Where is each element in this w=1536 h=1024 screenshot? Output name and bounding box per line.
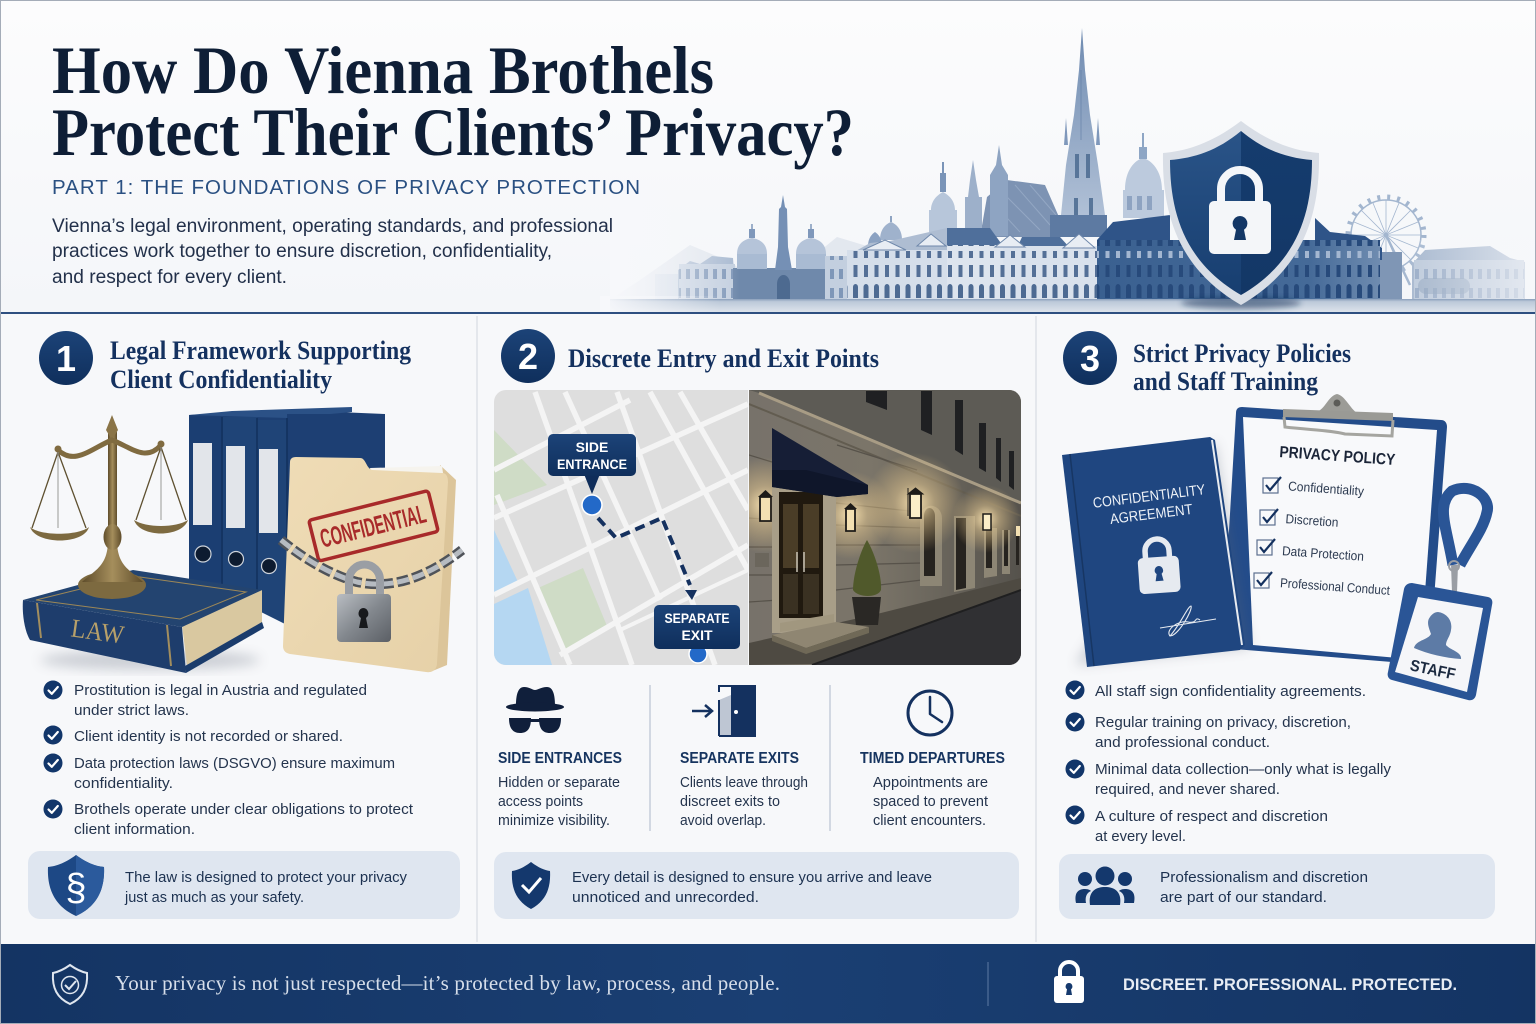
illustration: clipboard	[1222, 394, 1447, 665]
bullet: minimal data	[1066, 760, 1392, 798]
feature: timed departures: TIMED DEPARTURES	[860, 750, 1005, 767]
lamps glow	[749, 460, 772, 549]
heading: Legal Framework Supporting	[110, 335, 411, 365]
feature: timed departures: spaced to prevent	[873, 793, 989, 810]
person silhouette	[1414, 612, 1461, 659]
pin: separate exit: SEPARATE	[664, 610, 730, 626]
illustration: confidentiality agreement book: AGREEMENT	[1109, 502, 1194, 528]
skyline illustration of Vienna	[600, 28, 1536, 312]
feature: side entrances: access points	[498, 793, 583, 810]
door	[772, 483, 836, 633]
feature: separate exits	[680, 686, 808, 829]
bullet: data protection: Data protection laws (DSGVO) ensure maximum	[74, 755, 395, 772]
panel: privacy policies	[1059, 331, 1495, 919]
icon: people	[1075, 866, 1135, 905]
feature: separate exits: discreet exits to	[680, 793, 780, 810]
clip	[1283, 394, 1393, 436]
illustration: staff badge	[1388, 488, 1492, 700]
chain	[281, 540, 462, 584]
footer bar	[0, 944, 1536, 1024]
bullet: confidentiality agreements: All staff sign confidentiality agreements.	[1095, 683, 1366, 700]
callout: professionalism: are part of our standard.	[1160, 889, 1327, 906]
illustration: staff badge: STAFF	[1408, 657, 1457, 684]
intro paragraph: Vienna’s legal environment, operating standards, and professional	[52, 216, 613, 237]
heading: Discrete Entry and Exit Points	[568, 343, 879, 373]
bullet list	[1066, 680, 1392, 845]
footer slogan: DISCREET. PROFESSIONAL. PROTECTED.	[1123, 975, 1457, 994]
bullet: minimal data: required, and never shared.	[1095, 781, 1280, 798]
padlock	[349, 564, 380, 598]
heading: Client Confidentiality	[110, 364, 332, 394]
steps	[780, 614, 834, 632]
awning	[772, 428, 868, 497]
feature: timed departures: Appointments are	[873, 774, 988, 791]
lamps	[758, 488, 1020, 536]
illustration: confidential folder	[281, 457, 462, 672]
dark palace	[1097, 215, 1402, 300]
feature: separate exits: SEPARATE EXITS	[680, 750, 799, 767]
pin: separate exit: EXIT	[681, 627, 713, 643]
pale palace	[825, 216, 1097, 300]
faint hills and far buildings	[610, 237, 870, 300]
title: Protect Their Clients’ Privacy?	[52, 94, 854, 170]
bullet list	[44, 680, 414, 838]
route	[598, 518, 690, 585]
signature	[1160, 606, 1216, 636]
ground band	[600, 296, 1536, 312]
illustration: binders	[189, 407, 385, 625]
bullet: minimal data: Minimal data collection—only what is legally	[1095, 761, 1392, 778]
bullet: obligations	[44, 800, 414, 838]
callout: every detail	[494, 852, 1019, 919]
callout: professionalism	[1059, 854, 1495, 919]
bullet: obligations: client information.	[74, 821, 195, 838]
icon: shield with check	[512, 862, 550, 909]
ferris wheel	[1348, 197, 1424, 285]
map	[494, 390, 748, 665]
header banner	[0, 0, 1536, 312]
illustration: scales	[30, 415, 188, 599]
bullet: client identity: Client identity is not recorded or shared.	[74, 728, 343, 745]
illustration: clipboard: PRIVACY POLICY	[1279, 444, 1396, 469]
heading: Strict Privacy Policies	[1133, 338, 1351, 368]
pin: side entrance	[548, 434, 636, 515]
feature: side entrances	[498, 687, 622, 829]
faint right palace	[1412, 246, 1525, 300]
sidewalk and road	[749, 578, 1021, 665]
bullet: data protection	[44, 754, 395, 792]
number badge 2: 2	[518, 336, 538, 377]
feature: timed departures: client encounters.	[873, 812, 986, 829]
intro paragraph	[52, 216, 613, 288]
feature: side entrances: SIDE ENTRANCES	[498, 750, 622, 767]
icon: shield with paragraph sign	[48, 855, 104, 916]
potted plant	[853, 540, 881, 596]
stamp	[309, 491, 438, 561]
heading	[110, 335, 411, 394]
gothic cathedral and towers	[929, 28, 1164, 237]
callout: professionalism: Professionalism and discretion	[1160, 869, 1368, 886]
bullet: regular training	[1066, 712, 1351, 751]
callout: law	[28, 851, 460, 919]
illustration: law book: LAW	[69, 614, 126, 650]
upper floor	[749, 390, 1021, 503]
bullet: legal in Austria	[44, 680, 367, 719]
panel: entry and exit	[494, 329, 1021, 919]
number badge 2	[501, 329, 555, 383]
pin: side entrance: ENTRANCE	[557, 456, 627, 472]
wall plate	[755, 553, 769, 567]
number badge 3: 3	[1080, 338, 1100, 379]
pin: side entrance: SIDE	[576, 439, 608, 455]
icon: hat and glasses	[506, 687, 564, 733]
title: How Do Vienna Brothels	[52, 32, 714, 108]
icon: clock	[908, 691, 952, 735]
callout: law: just as much as your safety.	[124, 889, 304, 906]
bullet: data protection: confidentiality.	[74, 775, 173, 792]
illustration: law book	[23, 570, 264, 673]
heading	[1133, 338, 1351, 396]
callout: every detail: Every detail is designed to ensure you arrive and leave	[572, 869, 932, 886]
feature: separate exits: avoid overlap.	[680, 812, 766, 829]
heading: and Staff Training	[1133, 366, 1318, 396]
checklist: Discretion	[1285, 511, 1339, 530]
checklist: Data Protection	[1282, 543, 1364, 564]
bullet: obligations: Brothels operate under clear obligations to protect	[74, 801, 414, 818]
number badge 1	[39, 331, 93, 385]
lock	[1136, 538, 1181, 594]
icon: shield outline	[53, 965, 87, 1004]
callout: law: The law is designed to protect your privacy	[125, 869, 407, 886]
feature: timed departures	[860, 691, 1005, 829]
illustration: confidentiality agreement book: CONFIDENTIALITY	[1092, 482, 1206, 512]
lanyard	[1443, 488, 1488, 565]
checklist: Professional Conduct	[1280, 575, 1391, 598]
bullet: regular training: and professional conduct.	[1095, 734, 1270, 751]
stone courses	[749, 445, 922, 602]
bullet: culture	[1066, 806, 1328, 845]
bullet: regular training: Regular training on privacy, discretion,	[1095, 714, 1351, 731]
bullet: culture: at every level.	[1095, 828, 1186, 845]
windows and second door	[920, 506, 1010, 592]
callout: every detail: unnoticed and unrecorded.	[572, 889, 759, 906]
number badge 1: 1	[56, 338, 76, 379]
bullet: legal in Austria: Prostitution is legal in Austria and regulated	[74, 682, 367, 699]
checklist: Confidentiality	[1288, 478, 1365, 499]
feature: side entrances: minimize visibility.	[498, 812, 610, 829]
illustration: confidentiality agreement book	[1062, 437, 1250, 667]
title	[52, 32, 854, 170]
bullet: legal in Austria: under strict laws.	[74, 702, 189, 719]
icon: footer lock	[1054, 962, 1084, 1003]
icon: door with arrow	[692, 686, 755, 736]
feature: separate exits: Clients leave through	[680, 774, 808, 791]
number badge 3	[1063, 331, 1117, 385]
domes, column and arcade	[733, 195, 826, 300]
feature: side entrances: Hidden or separate	[498, 774, 620, 791]
checklist	[1254, 477, 1391, 598]
intro paragraph: practices work together to ensure discretion, confidentiality,	[52, 241, 552, 262]
stamp: CONFIDENTIAL	[317, 498, 429, 554]
footer message: Your privacy is not just respected—it’s protected by law, process, and people.	[115, 971, 780, 995]
subtitle: PART 1: THE FOUNDATIONS OF PRIVACY PROTECTION	[52, 176, 640, 199]
street photo scene	[749, 390, 1021, 665]
shield with padlock	[1163, 121, 1319, 309]
intro paragraph: and respect for every client.	[52, 267, 287, 288]
icon: shield with paragraph sign: §	[65, 867, 87, 909]
panel: legal framework	[23, 331, 462, 919]
pin: separate exit	[654, 605, 740, 663]
bullet: culture: A culture of respect and discretion	[1095, 808, 1328, 825]
